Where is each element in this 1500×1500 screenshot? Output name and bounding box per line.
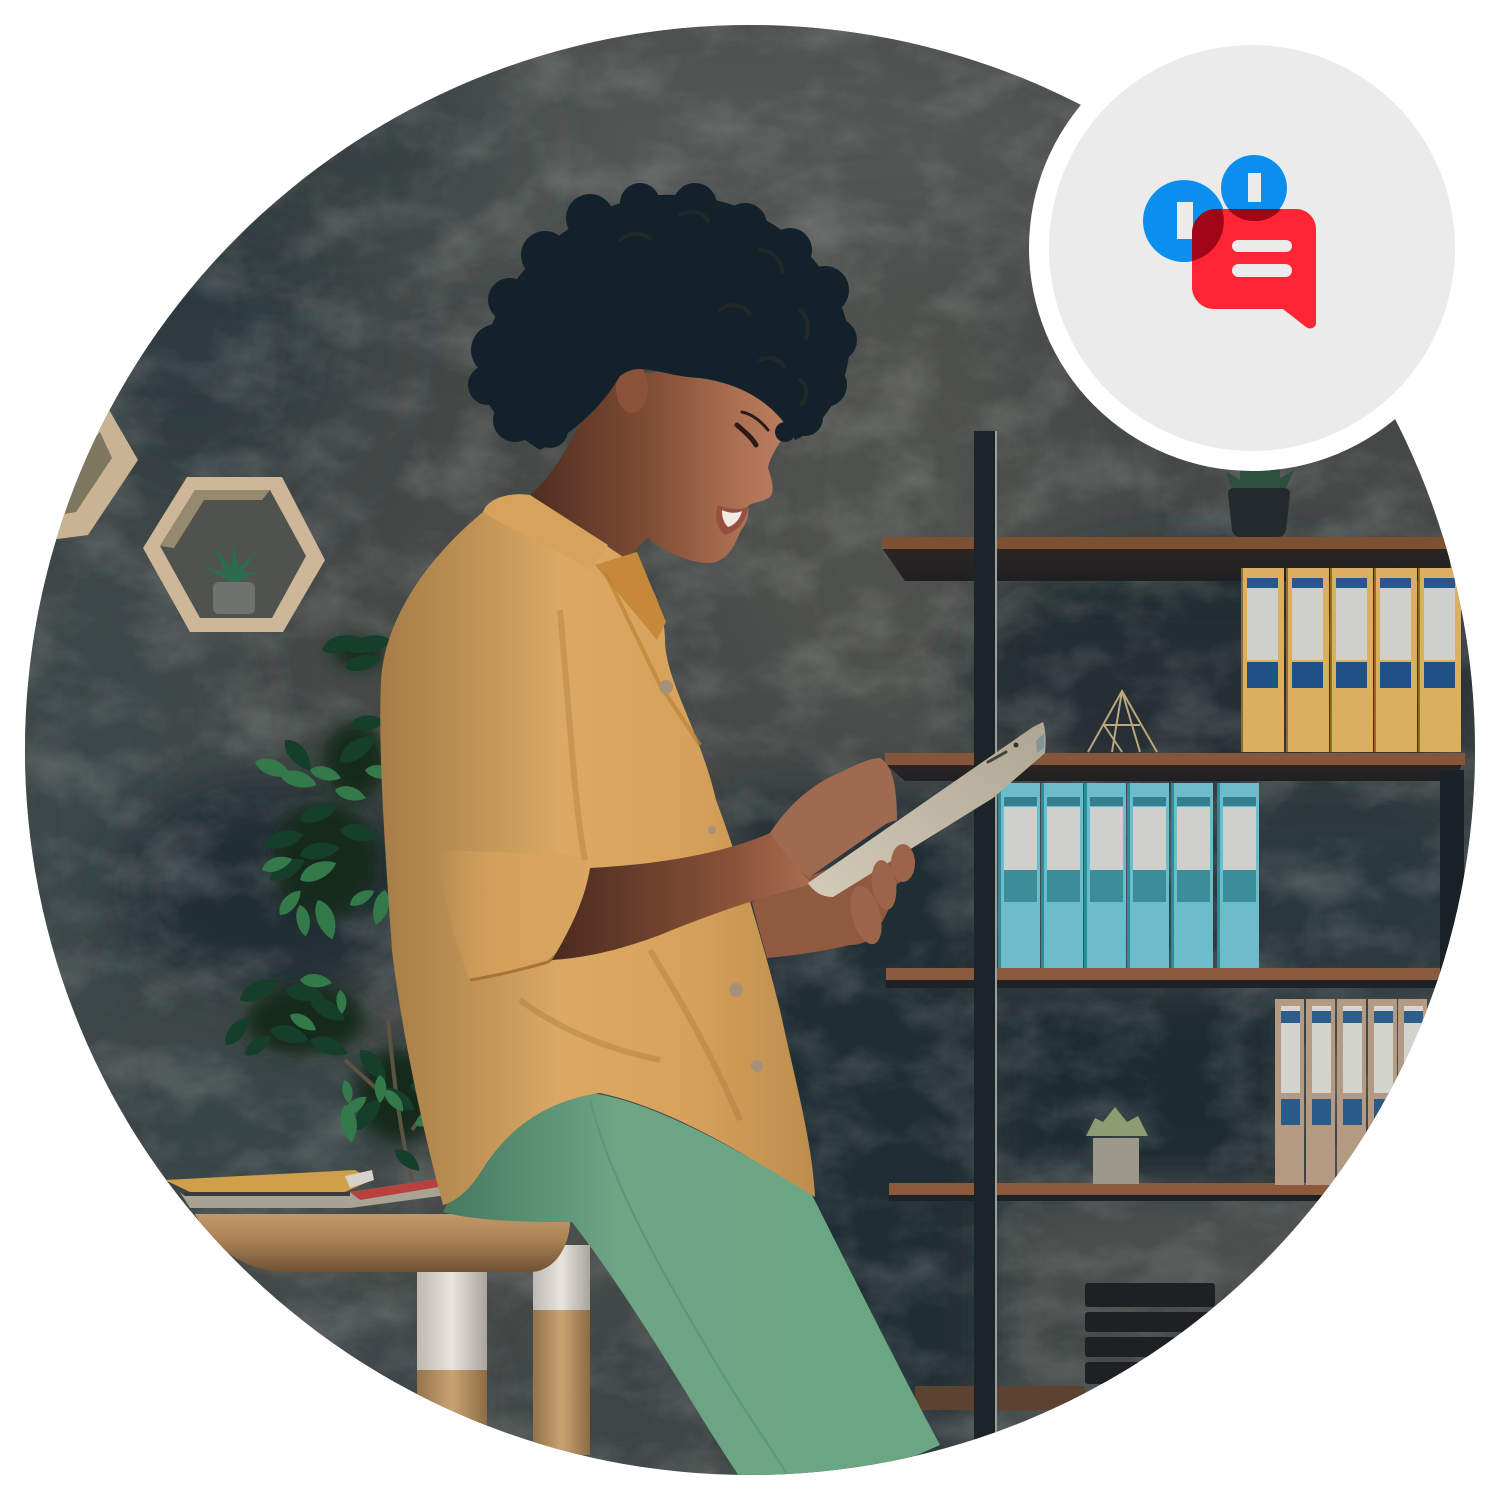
shelf 4 — [889, 1183, 1334, 1201]
wire pyramid ornament — [1088, 691, 1157, 752]
main upright post — [974, 431, 997, 1451]
closed eye and brow — [737, 412, 768, 445]
badge white ring — [1029, 25, 1475, 471]
beige binders — [1275, 999, 1427, 1185]
hexagon wall shelf with plant — [143, 477, 325, 632]
upper hand — [770, 758, 897, 878]
books on table — [165, 1170, 447, 1208]
icon badge — [1029, 25, 1475, 471]
overlap with left bubble — [1192, 209, 1224, 261]
table near leg — [417, 1272, 487, 1425]
dark plant pot on top shelf — [1226, 468, 1294, 537]
shelving unit — [882, 431, 1465, 1451]
yellow shirt body — [380, 494, 815, 1205]
ficus plant — [225, 626, 427, 1180]
teal binders — [998, 783, 1259, 968]
small plant in hexagon — [200, 542, 260, 582]
right upright post — [1440, 770, 1464, 972]
shirt folds — [520, 610, 740, 1120]
succulent in metal pot — [1086, 1107, 1148, 1184]
table far leg — [533, 1245, 590, 1455]
ear — [616, 363, 648, 413]
shelf 2 — [885, 753, 1465, 781]
shelf 5 — [915, 1386, 1085, 1410]
blue bubble left — [1143, 180, 1225, 262]
badge grey disc — [1049, 45, 1455, 451]
shirt buttons — [659, 680, 763, 1072]
green trousers — [443, 1093, 940, 1480]
lower hand behind tablet — [752, 845, 913, 958]
woman — [380, 183, 1046, 1480]
overlap with right bubble — [1228, 209, 1281, 221]
trouser seam — [590, 1100, 790, 1480]
shelf 3 — [886, 968, 1442, 988]
red message bubble — [1192, 209, 1316, 328]
rolled sleeve cuff — [436, 850, 590, 980]
neck and face — [528, 372, 795, 575]
tablet ports — [988, 733, 1044, 762]
curly hair — [468, 183, 857, 450]
lower fingers — [845, 844, 915, 948]
dark wall vent — [1085, 1283, 1215, 1384]
blue bubble right — [1221, 155, 1287, 221]
plant dark foliage masses — [245, 636, 444, 1143]
tablet — [808, 722, 1046, 897]
hexagon wall shelf, left partial — [50, 408, 138, 540]
shelf 1 — [882, 537, 1450, 581]
yellow binders — [1241, 568, 1461, 752]
collar — [483, 494, 608, 570]
smile — [716, 505, 748, 535]
placket shade — [605, 572, 700, 745]
hair highlights — [620, 212, 808, 404]
forearm — [552, 833, 812, 960]
icon: chat bubbles — [1143, 155, 1316, 328]
wooden table — [195, 1214, 590, 1455]
